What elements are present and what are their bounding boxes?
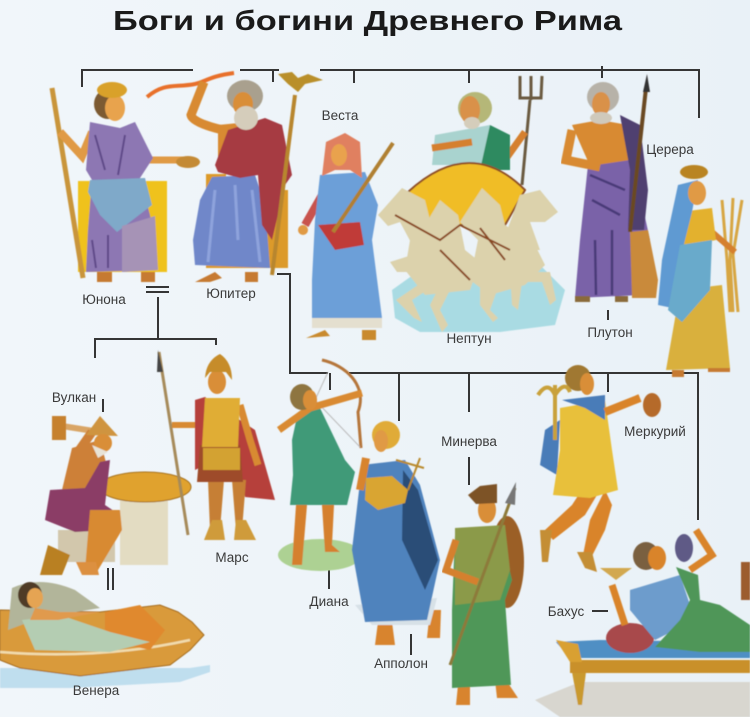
- purple dress: [86, 122, 158, 272]
- tunic: [432, 125, 500, 165]
- belt strips: [203, 448, 240, 470]
- arm holding cup: [612, 585, 625, 625]
- couch legs: [572, 672, 586, 705]
- label: Minerva: Минерва: [441, 434, 497, 449]
- figure: Apollo: [352, 421, 441, 645]
- hair: [290, 384, 314, 410]
- spear: [159, 352, 188, 535]
- hair: [18, 582, 42, 608]
- tunic: [553, 400, 618, 498]
- face: [460, 96, 480, 124]
- label: Bacchus: Бахус: [548, 604, 584, 619]
- forearm: [432, 142, 472, 148]
- robe: [45, 460, 120, 532]
- figure: Minerva: [446, 482, 524, 705]
- water: [392, 265, 565, 332]
- cup: [600, 568, 632, 580]
- label: Mercury: Меркурий: [624, 424, 686, 439]
- beard: [464, 117, 480, 129]
- yellow skirt: [666, 285, 730, 370]
- blue drape: [88, 178, 152, 232]
- hair: [372, 421, 400, 449]
- lyre: [365, 476, 408, 510]
- shield: [490, 516, 524, 608]
- couch frame: [570, 660, 750, 673]
- bowstring: [315, 372, 360, 447]
- helmet on floor: [40, 545, 70, 575]
- spear tip: [643, 74, 650, 92]
- hair: [458, 92, 492, 124]
- hair: [227, 80, 263, 112]
- sandals: [540, 530, 597, 572]
- label: Jupiter: Юпитер: [206, 286, 256, 301]
- face: [592, 92, 610, 116]
- label: Pluto: Плутон: [587, 325, 633, 340]
- cape collar: [562, 395, 605, 420]
- family tree connector lines: [82, 66, 699, 655]
- stole: [620, 115, 648, 230]
- helmet: [468, 484, 497, 504]
- robe: [352, 460, 440, 622]
- water: [0, 665, 210, 688]
- green dress: [452, 530, 512, 688]
- label: Juno: Юнона: [82, 292, 126, 307]
- armour: [202, 398, 240, 447]
- bag: [643, 393, 661, 417]
- shell top: [8, 582, 100, 630]
- figure: Pluto: [566, 74, 658, 302]
- cap: [86, 416, 118, 436]
- eagle: [278, 72, 323, 92]
- horses: [378, 188, 558, 332]
- arm: [446, 540, 478, 582]
- cap: [680, 165, 708, 179]
- title: Боги и богини Древнего Рима: [113, 5, 623, 36]
- chariot: [408, 163, 525, 225]
- olive top: [455, 525, 510, 605]
- shell: [0, 605, 204, 676]
- arm: [305, 195, 322, 225]
- leg: [85, 510, 122, 575]
- anvil: [99, 472, 191, 502]
- drapery: [22, 615, 150, 652]
- figure: Jupiter: [147, 72, 323, 282]
- dark folds: [402, 470, 438, 590]
- face: [478, 497, 496, 523]
- foot: [672, 368, 730, 377]
- face: [233, 92, 253, 116]
- tunic: [630, 575, 695, 640]
- face: [94, 434, 112, 452]
- dress folds: [92, 135, 125, 268]
- saucer: [176, 156, 200, 168]
- face: [208, 370, 226, 394]
- face: [374, 430, 388, 452]
- face: [105, 95, 125, 121]
- arm: [712, 232, 735, 252]
- lightning: [147, 73, 234, 97]
- jug: [741, 562, 750, 600]
- arm left: [60, 132, 92, 156]
- blue veil: [658, 180, 698, 310]
- horse legs: [390, 255, 556, 332]
- feet: [575, 296, 628, 302]
- spear tip: [505, 482, 516, 505]
- red drape: [215, 118, 292, 240]
- beard: [590, 112, 612, 124]
- hammer head: [52, 416, 66, 440]
- label: Vesta: Веста: [322, 108, 359, 123]
- caduceus: [538, 385, 570, 440]
- figure: Juno: [52, 82, 200, 282]
- label: Ceres: Церера: [646, 142, 694, 157]
- hand: [298, 225, 308, 235]
- helmet: [205, 354, 232, 380]
- blue robe: [193, 175, 270, 268]
- hair: [633, 542, 659, 570]
- sceptre: [272, 95, 295, 275]
- legs: [545, 485, 612, 560]
- figure: Neptune: [378, 76, 565, 332]
- skirt highlight: [122, 216, 158, 272]
- veil: [322, 133, 362, 178]
- face: [648, 546, 666, 570]
- robe folds: [208, 185, 260, 262]
- torso: [572, 120, 630, 166]
- face: [331, 144, 347, 166]
- arm: [78, 432, 92, 452]
- figure: Vesta: [298, 133, 393, 340]
- figure: Ceres: [658, 165, 742, 377]
- label: Diana: Диана: [309, 594, 349, 609]
- shell ribs: [0, 640, 190, 654]
- shadow: [535, 682, 750, 717]
- face: [303, 390, 317, 410]
- grapes: [675, 534, 693, 562]
- robe: [575, 158, 650, 298]
- green cloak: [480, 125, 510, 170]
- hair: [587, 82, 619, 112]
- torso: [218, 120, 272, 170]
- foot: [76, 562, 99, 575]
- robe folds: [590, 175, 625, 295]
- label: Neptune: Нептун: [446, 331, 492, 346]
- beard: [234, 106, 258, 130]
- hem: [355, 598, 437, 625]
- figure: Diana: [278, 360, 362, 571]
- cape: [540, 420, 560, 475]
- raised arm: [191, 82, 232, 132]
- crown: [97, 82, 127, 98]
- arm right: [146, 156, 186, 164]
- stone seat: [58, 530, 115, 562]
- feet: [97, 272, 155, 282]
- green dress: [290, 408, 355, 505]
- spear tip: [157, 350, 163, 372]
- feet: [306, 330, 376, 340]
- teal skirt: [668, 240, 712, 322]
- arm: [360, 458, 366, 490]
- throne: [206, 174, 288, 268]
- label: Venus: Венера: [73, 683, 120, 698]
- legs: [208, 480, 246, 530]
- yellow top: [680, 208, 716, 248]
- trident: [520, 76, 542, 185]
- raised arm: [690, 530, 712, 570]
- figure: Venus in shell: [0, 582, 210, 688]
- beard: [92, 445, 108, 458]
- face: [27, 588, 43, 608]
- pillow: [606, 623, 654, 653]
- boots: [204, 520, 256, 540]
- green drape: [655, 567, 750, 652]
- arm: [605, 398, 640, 412]
- near horse right: [460, 188, 545, 295]
- label: Apollo: Апполон: [374, 656, 428, 671]
- hair: [94, 89, 122, 119]
- face: [580, 373, 594, 395]
- grass: [278, 539, 362, 571]
- spear: [630, 88, 646, 232]
- body: [30, 608, 100, 620]
- arm: [505, 132, 525, 160]
- lyre frame: [396, 458, 424, 490]
- left arm: [172, 422, 195, 428]
- column: [120, 498, 168, 565]
- belt: [318, 222, 364, 250]
- couch head: [556, 640, 582, 662]
- torch staff: [333, 143, 393, 232]
- feet: [456, 680, 518, 705]
- arm: [566, 130, 600, 167]
- figure: Vulcan: [40, 416, 191, 575]
- label: Vulcan: Вулкан: [52, 390, 96, 405]
- hammer handle: [62, 426, 100, 432]
- kilt: [197, 445, 243, 482]
- feet: [375, 610, 441, 645]
- hem: [312, 318, 382, 328]
- staff: [52, 88, 83, 278]
- right arm: [240, 405, 258, 465]
- arms: [279, 393, 362, 430]
- couch cushion: [556, 640, 750, 658]
- far horses: [378, 188, 558, 250]
- wheat: [722, 198, 742, 312]
- figure: Bacchus: [535, 530, 750, 717]
- torso: [62, 440, 108, 490]
- hair: [565, 365, 591, 391]
- throne: [78, 181, 167, 272]
- label: Mars: Марс: [215, 550, 249, 565]
- blanket: [105, 605, 165, 650]
- dog: [630, 230, 658, 298]
- bow: [322, 360, 361, 448]
- near horse left: [405, 200, 480, 295]
- spear: [450, 488, 515, 665]
- face: [688, 181, 706, 205]
- figure: Mars: [157, 350, 275, 540]
- figure: Mercury: [538, 365, 661, 572]
- cape: [195, 397, 275, 500]
- legs: [292, 505, 340, 565]
- feet: [195, 272, 258, 282]
- harness: [395, 215, 510, 280]
- blue dress: [312, 172, 382, 318]
